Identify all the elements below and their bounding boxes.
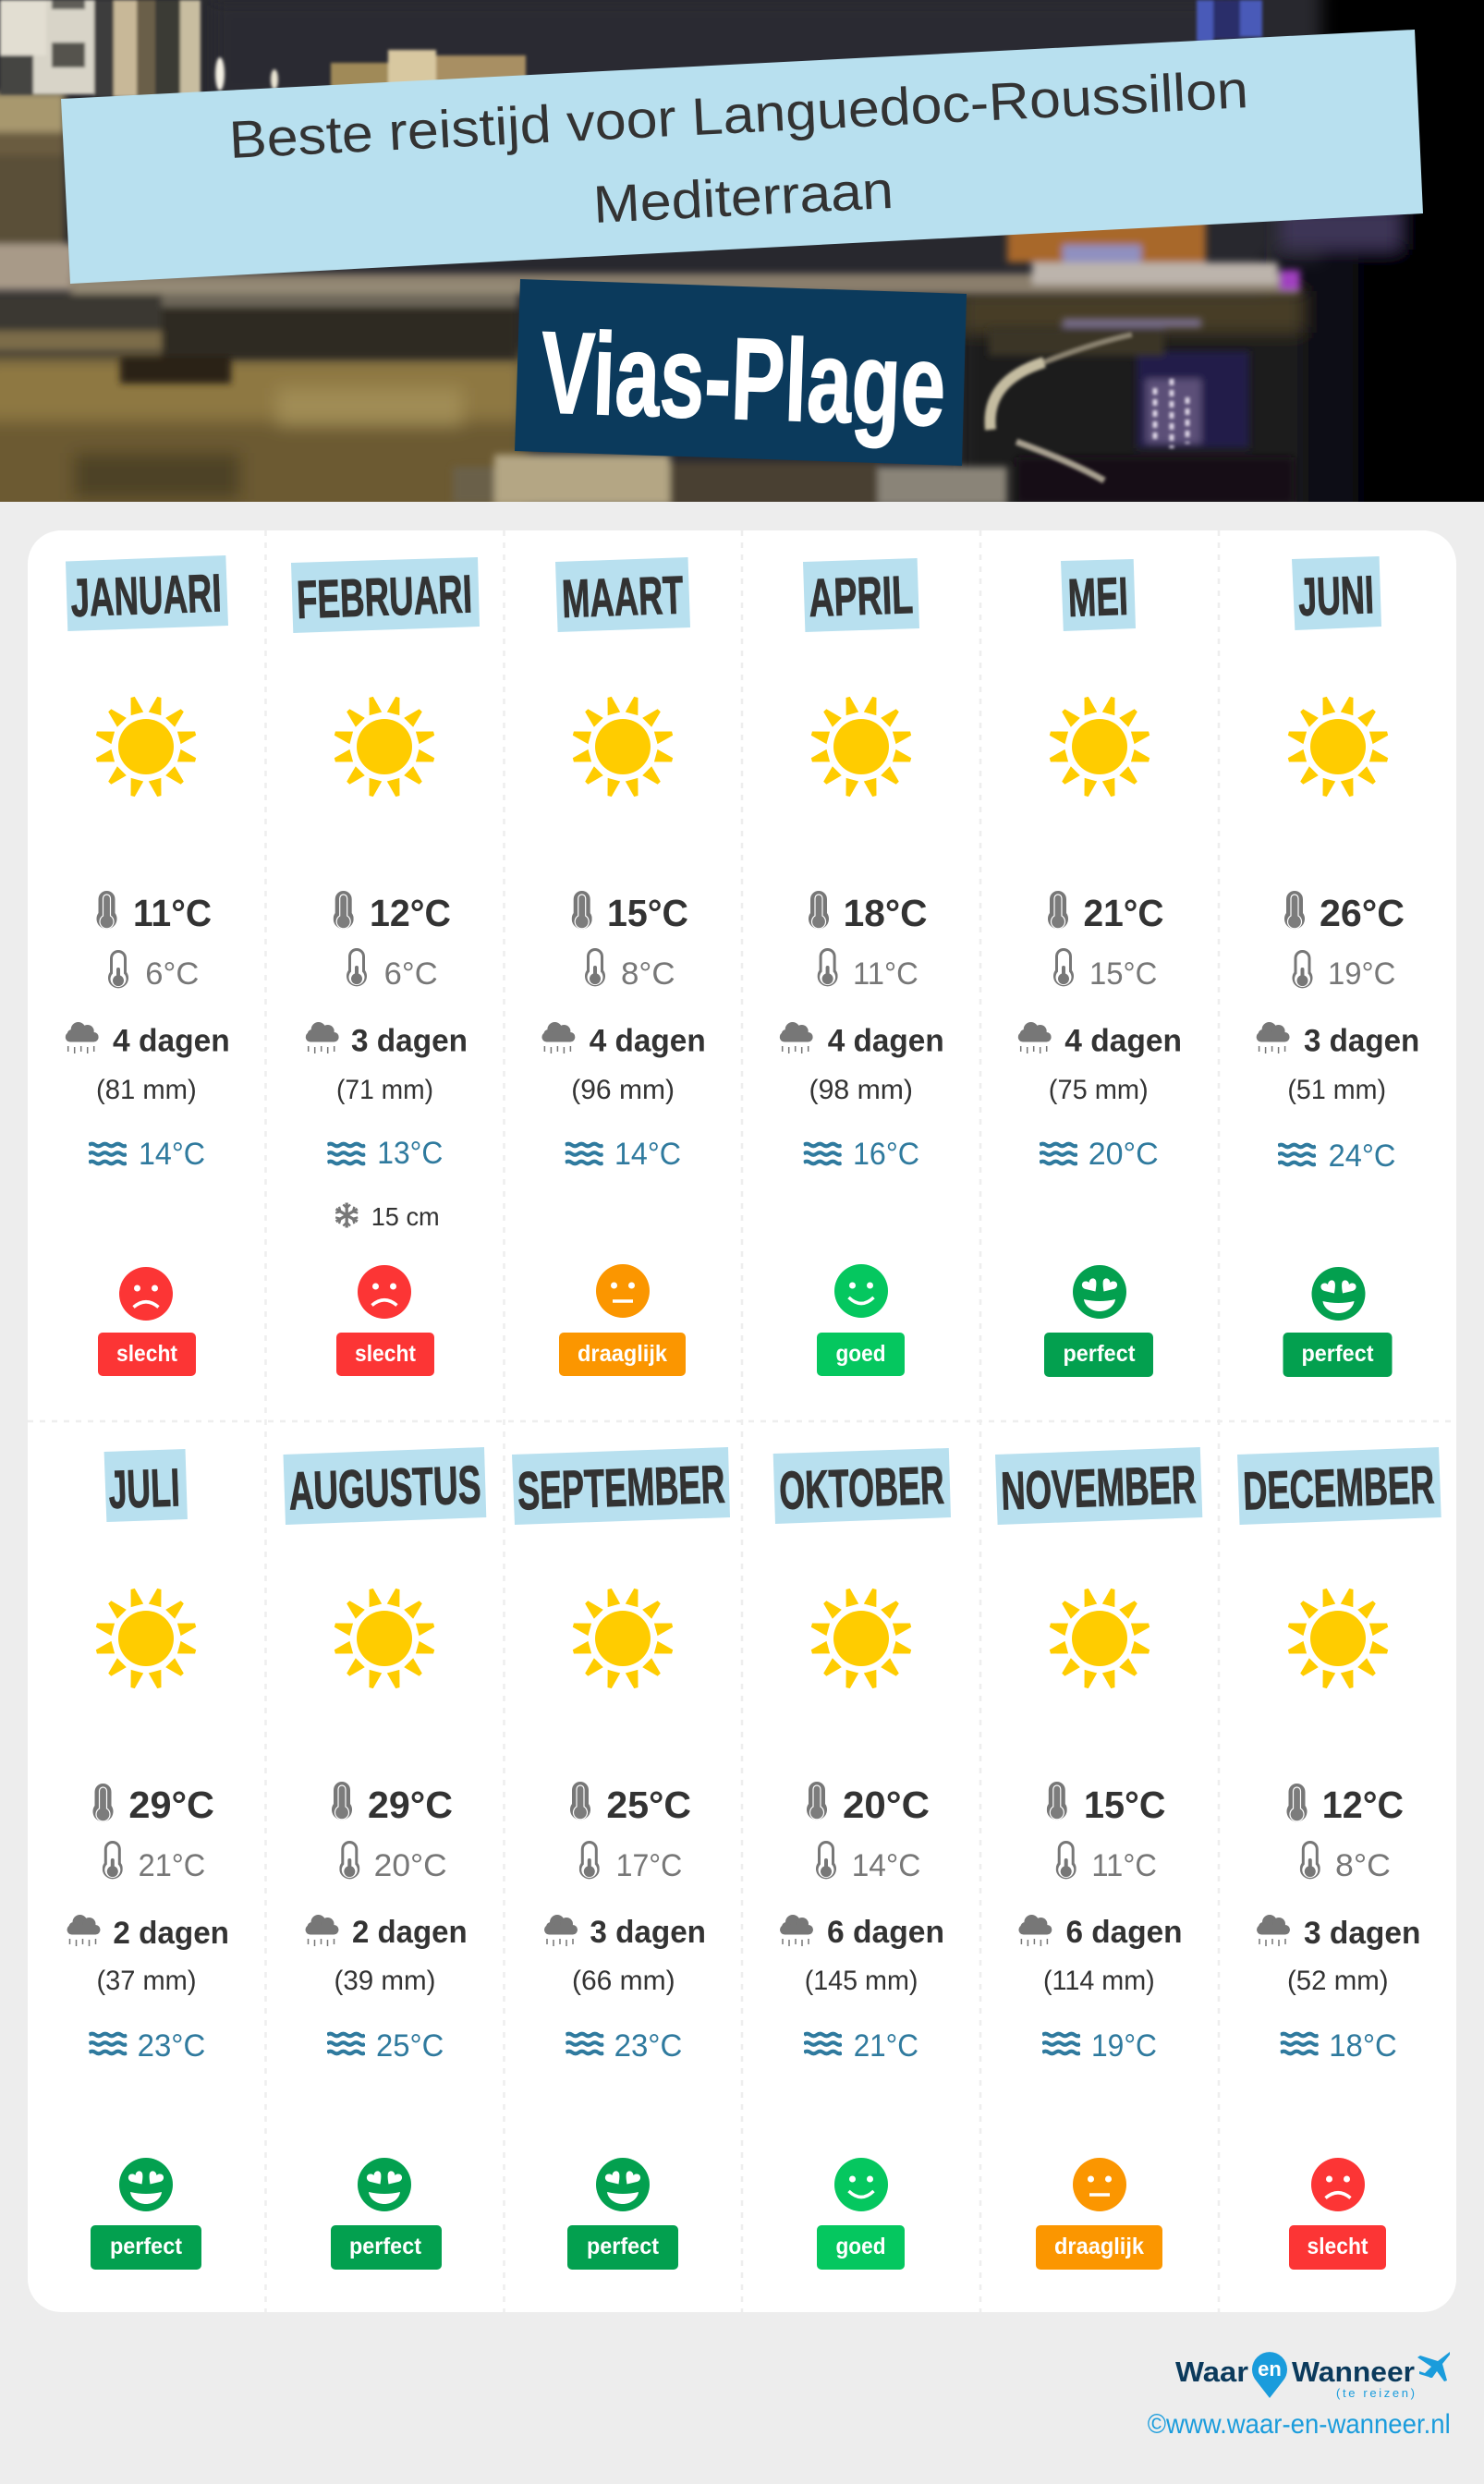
rating: perfect (587, 2234, 660, 2259)
rating (98, 1267, 196, 1376)
copyright url: ©www.waar-en-wanneer.nl (1148, 2409, 1451, 2440)
sea temperature: 13°C (377, 1136, 443, 1171)
rating: draaglijk (1054, 2234, 1144, 2259)
month panel: januari (66, 555, 230, 1376)
month panel: december (1237, 1447, 1441, 2270)
min temperature: 11°C (853, 956, 918, 992)
rating (91, 2158, 201, 2270)
month label (66, 555, 228, 631)
logo tagline: (te reizen) (1336, 2386, 1415, 2400)
title banner (61, 30, 1423, 284)
max temperature: 20°C (843, 1784, 930, 1826)
sea temperature (1281, 2028, 1397, 2064)
max temperature (807, 1782, 930, 1826)
month label (995, 1447, 1202, 1525)
icon: sun (95, 696, 197, 798)
max temperature (332, 1782, 453, 1826)
destination banner: Vias-Plage (515, 279, 967, 466)
title line 2: Mediterraan (591, 161, 894, 235)
min temperature (818, 948, 918, 992)
sea temperature (566, 2028, 682, 2064)
max temperature (1284, 891, 1405, 934)
max temperature (572, 891, 688, 934)
rating: slecht (116, 1341, 178, 1367)
max temperature (1286, 1784, 1404, 1826)
rating (1036, 2158, 1162, 2270)
rainfall: (52 mm) (1287, 1966, 1388, 1996)
rain days: 4 dagen (828, 1024, 944, 1059)
month panel: maart (541, 557, 706, 1376)
rain days: 4 dagen (590, 1024, 706, 1059)
snow depth (335, 1202, 440, 1231)
max temperature: 29°C (368, 1784, 453, 1826)
month label: MAART (561, 565, 685, 629)
rainfall: (75 mm) (1049, 1075, 1149, 1105)
month label: JULI (107, 1457, 181, 1520)
card panel (28, 530, 1456, 2312)
min temperature: 8°C (1335, 1848, 1391, 1883)
max temperature: 25°C (606, 1784, 691, 1826)
rating: perfect (349, 2234, 422, 2259)
rainfall: (51 mm) (1287, 1075, 1386, 1105)
sea temperature: 23°C (614, 2028, 682, 2064)
rating (336, 1265, 434, 1376)
min temperature: 14°C (852, 1848, 920, 1883)
month label: NOVEMBER (1000, 1455, 1197, 1521)
rain days: 2 dagen (352, 1915, 468, 1950)
min temperature: 6°C (384, 956, 438, 992)
month panel: mei (1018, 559, 1182, 1377)
month label (283, 1447, 486, 1525)
month label (291, 557, 480, 633)
rain days: 4 dagen (113, 1024, 230, 1059)
min temperature (108, 950, 199, 992)
rating: perfect (1301, 1341, 1374, 1367)
month panel: oktober (773, 1448, 951, 2270)
sea temperature (327, 2028, 444, 2064)
month panel: februari (291, 557, 480, 1376)
rain days: 6 dagen (1066, 1915, 1183, 1950)
month panel: juli (67, 1449, 229, 2270)
icon: sun (572, 1588, 674, 1689)
rating: goed (835, 2234, 885, 2259)
sea temperature (327, 1136, 443, 1171)
month label (555, 557, 690, 632)
min temperature (1056, 1841, 1157, 1883)
rating (331, 2158, 442, 2270)
rating (1283, 1267, 1392, 1377)
icon: sun (810, 1588, 912, 1689)
rainfall: (81 mm) (96, 1075, 197, 1105)
sea temperature: 24°C (1329, 1138, 1395, 1174)
rain days (306, 1022, 468, 1059)
sea temperature (1040, 1137, 1159, 1172)
min temperature: 8°C (621, 956, 675, 992)
sea temperature (1042, 2028, 1157, 2064)
min temperature: 6°C (145, 956, 199, 992)
sea temperature (89, 1137, 205, 1172)
rating: perfect (1063, 1341, 1136, 1367)
month panel: november (995, 1447, 1202, 2270)
snow depth: 15 cm (371, 1202, 440, 1231)
rain days: 2 dagen (113, 1916, 229, 1951)
rainfall: (96 mm) (571, 1075, 675, 1105)
icon: sun (334, 1588, 435, 1689)
icon: map pin: en (1258, 2357, 1282, 2380)
rainfall: (71 mm) (336, 1075, 433, 1105)
logo word: Waar: Waar (1175, 2356, 1248, 2388)
max temperature: 18°C (844, 892, 928, 934)
month label (512, 1447, 730, 1525)
rain days (66, 1022, 230, 1059)
rating (1289, 2158, 1386, 2270)
month label: MEI (1067, 566, 1129, 628)
icon: airplane (1417, 2352, 1450, 2381)
sea temperature: 20°C (1089, 1137, 1159, 1172)
icon: sun (572, 696, 674, 798)
month label: AUGUSTUS (287, 1455, 482, 1521)
month label: FEBRUARI (296, 564, 473, 630)
sea temperature: 18°C (1329, 2028, 1397, 2064)
min temperature: 11°C (1091, 1848, 1157, 1883)
rating: slecht (1307, 2234, 1368, 2259)
month panel: augustus (283, 1447, 486, 2270)
icon: map pin (1252, 2352, 1287, 2398)
sea temperature (566, 1137, 681, 1172)
month label (773, 1448, 951, 1524)
rating (567, 2158, 678, 2270)
icon: sun (1049, 1588, 1150, 1689)
min temperature (579, 1841, 682, 1883)
logo: Waar en Wanneer (1175, 2352, 1450, 2400)
sea temperature: 16°C (853, 1137, 919, 1172)
rain days: 3 dagen (590, 1915, 706, 1950)
month label: JANUARI (69, 563, 223, 628)
icon: sun (95, 1588, 197, 1689)
rating (817, 2158, 905, 2270)
min temperature (1300, 1841, 1391, 1883)
max temperature: 15°C (607, 892, 688, 934)
month label (104, 1449, 188, 1522)
month panel: april (780, 558, 944, 1376)
max temperature (92, 1784, 214, 1826)
rain days (541, 1022, 706, 1059)
min temperature (103, 1841, 205, 1883)
max temperature (1047, 1782, 1166, 1826)
sea temperature (804, 1137, 919, 1172)
min temperature (347, 948, 438, 992)
icon: sun (334, 696, 435, 798)
sea temperature (89, 2028, 205, 2064)
rainfall: (39 mm) (335, 1966, 436, 1996)
min temperature (816, 1841, 920, 1883)
logo word: Wanneer: Wanneer (1292, 2356, 1415, 2388)
rain days (67, 1915, 229, 1951)
rating: goed (835, 1341, 885, 1367)
rain days: 3 dagen (1304, 1916, 1420, 1951)
rating (817, 1264, 905, 1376)
rainfall: (145 mm) (805, 1966, 918, 1996)
min temperature (339, 1841, 447, 1883)
min temperature (585, 948, 675, 992)
rainfall: (98 mm) (809, 1075, 913, 1105)
min temperature (1292, 950, 1395, 992)
rainfall: (37 mm) (96, 1966, 196, 1996)
month panel: juni (1257, 556, 1419, 1377)
month label (1292, 556, 1381, 630)
max temperature: 11°C (133, 892, 212, 934)
sea temperature (1278, 1138, 1395, 1174)
destination name: Vias-Plage (539, 307, 948, 451)
rating (559, 1264, 686, 1376)
max temperature: 29°C (128, 1784, 214, 1826)
rating (1044, 1265, 1153, 1377)
month label: JUNI (1297, 565, 1375, 627)
icon: sun (1287, 696, 1389, 798)
sea temperature: 19°C (1091, 2028, 1157, 2064)
month label: SEPTEMBER (517, 1455, 726, 1521)
rainfall: (114 mm) (1043, 1966, 1155, 1996)
max temperature: 15°C (1084, 1784, 1166, 1826)
rating: perfect (110, 2234, 183, 2259)
sea temperature: 23°C (138, 2028, 205, 2064)
max temperature: 12°C (370, 892, 451, 934)
max temperature (809, 891, 928, 934)
rating: draaglijk (578, 1341, 667, 1367)
rain days (305, 1915, 468, 1950)
sea temperature (804, 2028, 918, 2064)
month panel: september (512, 1447, 730, 2270)
month label (803, 558, 919, 632)
rainfall: (66 mm) (572, 1966, 675, 1996)
rain days: 3 dagen (351, 1024, 468, 1059)
max temperature: 21°C (1083, 892, 1164, 934)
month label: APRIL (808, 565, 914, 628)
max temperature: 26°C (1320, 892, 1405, 934)
sea temperature: 25°C (376, 2028, 444, 2064)
icon: sun (1049, 696, 1150, 798)
rain days: 4 dagen (1064, 1024, 1182, 1059)
max temperature: 12°C (1322, 1784, 1404, 1826)
min temperature: 20°C (374, 1848, 447, 1883)
rain days: 6 dagen (827, 1915, 944, 1950)
rain days (780, 1022, 944, 1059)
max temperature (334, 891, 451, 934)
header photo: night beach promenade (0, 0, 1484, 536)
icon: sun (810, 696, 912, 798)
max temperature (570, 1782, 691, 1826)
min temperature: 21°C (139, 1848, 205, 1883)
max temperature (96, 891, 212, 934)
rain days (1257, 1022, 1419, 1059)
sea temperature: 14°C (614, 1137, 681, 1172)
month label: OKTOBER (778, 1455, 945, 1521)
rating: slecht (355, 1341, 417, 1367)
rain days: 3 dagen (1304, 1024, 1419, 1059)
icon: sun (1287, 1588, 1389, 1689)
rain days (1257, 1915, 1420, 1951)
min temperature (1053, 948, 1157, 992)
title line 1: Beste reistijd voor Languedoc-Roussillon (227, 60, 1249, 170)
min temperature: 19°C (1328, 956, 1395, 992)
sea temperature: 21°C (854, 2028, 918, 2064)
min temperature: 15°C (1089, 956, 1157, 992)
max temperature (1048, 891, 1164, 934)
min temperature: 17°C (616, 1848, 682, 1883)
month label (1061, 559, 1136, 631)
sea temperature: 14°C (139, 1137, 205, 1172)
rain days (1018, 1022, 1182, 1059)
